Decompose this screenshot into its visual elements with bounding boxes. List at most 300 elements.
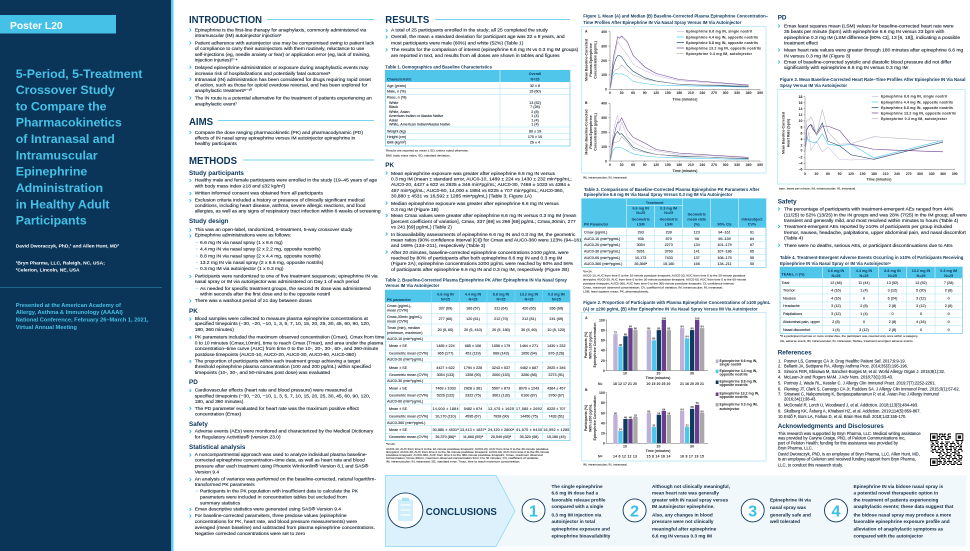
table 2 pk parameters: concentration; Cmax,30min, maximum observed concentration from 0 to 30 minutes; CV, coefficient of variation; bbox=[386, 456, 539, 460]
legend figure 2: Epinephrine 8.8 mg IN, bbox=[720, 380, 757, 384]
chart 2A: 0 bbox=[603, 369, 605, 373]
results bullets: The results for the comparison of interest (epinephrine 6.6 mg IN vs 0.3 mg IM groups) bbox=[391, 47, 579, 53]
table 2 pk parameters: 1358 (90) bbox=[465, 373, 481, 377]
table 2 pk parameters: Cmax,30min (pg/mL), bbox=[387, 315, 422, 319]
heading: introduction: INTRODUCTION bbox=[189, 15, 262, 26]
table 2 pk parameters: Mean ± SE bbox=[389, 366, 408, 370]
acknowledgments and disclosures: LLC, to conduct this research study. bbox=[778, 462, 843, 467]
references: Bellanti JA, Settipane RA. Allergy Asthma Proc. 2014;35(3):195-196. bbox=[784, 364, 908, 369]
chart 2B: N= bbox=[598, 454, 603, 458]
chart 2A: 20 bbox=[601, 359, 605, 363]
table 1 demographics: Asian bbox=[389, 118, 398, 122]
table 2 pk parameters: mean (CV%) bbox=[387, 308, 408, 312]
results pk bullets: vs 241 [69] pg/mL) (Table 2) bbox=[391, 224, 452, 230]
table 2 pk parameters: Geometric mean (CV%) bbox=[389, 394, 428, 398]
table 2 pk parameters: N=25 bbox=[525, 298, 533, 302]
table 2 pk parameters: 120 (61) bbox=[466, 317, 480, 321]
methods pk: Blood samples were collected to measure plasma epinephrine concentrations at bbox=[195, 316, 369, 322]
legend figure 3 bbox=[872, 95, 956, 121]
table 2 pk parameters: mean (CV%) bbox=[387, 320, 408, 324]
table 2 pk parameters: Mean ± SE bbox=[389, 428, 408, 432]
acknowledgments and disclosures: Acknowledgments and Disclosures bbox=[778, 423, 884, 430]
table 2 pk parameters: Table 2. Baseline-Corrected Plasma Epinephrine PK After Epinephrine IN Via Nasal Spray bbox=[385, 278, 568, 282]
table 2 pk parameters: 0.3 mg IM bbox=[548, 292, 565, 296]
table 3 pk comparison: 55 bbox=[750, 256, 754, 260]
chart 2B: 56 bbox=[657, 411, 661, 415]
figure 3 heart rate chart: 210 bbox=[883, 172, 889, 176]
statistical analysis: Emax descriptive statistics were generated using SAS® Version 9.4 bbox=[195, 506, 341, 512]
legend figure 1 bbox=[677, 30, 761, 56]
chart 1B: 180 bbox=[676, 163, 682, 167]
references: 6. bbox=[778, 387, 781, 392]
methods pk: postdose timepoints (AUC0-10, AUC0-20, AUC0-30, AUC0-60, AUC0-360) bbox=[195, 352, 356, 358]
methods pd: 180, and 360 minutes) bbox=[195, 399, 244, 405]
conclusion 1: 0.3 mg IM injection via bbox=[552, 513, 602, 518]
table 4 adverse events: 0 bbox=[948, 320, 950, 324]
introduction bullets: Epinephrine is the first-line therapy for anaphylaxis, commonly administered via bbox=[195, 28, 367, 34]
table 3 pk comparison: 3054 bbox=[637, 243, 645, 247]
table 4 adverse events: 2 (8) bbox=[945, 304, 952, 308]
poster title: Administration bbox=[16, 181, 103, 195]
conclusion 2: mean heart rate was generally bbox=[652, 490, 719, 495]
conclusion 4: compared with the autoinjector bbox=[854, 534, 923, 538]
chart 1B: 30 bbox=[620, 163, 624, 167]
chart 1B: Time (minutes) bbox=[673, 169, 697, 173]
chart 1A: 120 bbox=[653, 91, 659, 95]
table 3 pk comparison: 0.3 mg IM bbox=[660, 206, 677, 210]
aims text bbox=[190, 130, 363, 147]
references: Fleming JT, Clark S, Camargo CA Jr, Rudders SA. J Allergy Clin Immunol Pract. 2015;3(1):57-62. bbox=[784, 387, 960, 392]
methods pk bbox=[189, 308, 385, 376]
authors and affiliations: David Dworaczyk, PhD,¹ and Allen Hunt, MD² bbox=[16, 244, 119, 250]
table 2 pk parameters: Mean ± SE bbox=[389, 344, 408, 348]
table 3 pk comparison: 94–161 bbox=[718, 230, 731, 234]
table 4 adverse events: 2 (8) bbox=[889, 328, 896, 332]
results pd bullets: Emax least squares mean (LSM) values for baseline-corrected heart rate were bbox=[784, 24, 954, 30]
legend figure 1: Epinephrine 8.8 mg IN, opposite nostrils bbox=[686, 41, 758, 45]
conclusion 1: epinephrine exposure and bbox=[552, 526, 610, 532]
table 4 adverse events bbox=[780, 255, 964, 343]
figure 3 heart rate chart: 30 bbox=[815, 172, 818, 176]
references: Skulberg KK, Åsberg A, Khiabani HZ, et al. Addiction. 2019;114(5):859-867. bbox=[784, 408, 921, 413]
references: 2016;34(1):38-43. bbox=[784, 397, 817, 402]
table 4 adverse events: 3 (12) bbox=[831, 304, 841, 308]
chart 2A: 40 bbox=[601, 349, 605, 353]
conclusion 2 bbox=[623, 484, 730, 538]
results pk bullets: [percent coefficient of variation], Cmax, 337 [69] vs 266 [69] pg/mL; Cmax,30min, 277 bbox=[391, 219, 576, 225]
conclusion 4: alleviation of anaphylactic symptoms as bbox=[854, 526, 944, 532]
chart 1B: 390 bbox=[757, 163, 763, 167]
chart 1A: 210 bbox=[688, 91, 694, 95]
chart 2B: 76 bbox=[696, 401, 699, 405]
results pd bullets: Emax of baseline-corrected systolic and diastolic blood pressure did not differ bbox=[784, 60, 952, 66]
figure 1 epinephrine concentration profiles: Figure 1. Mean (A) and Median (B) Baseline-Corrected Plasma Epinephrine Concentration– bbox=[583, 14, 769, 18]
acknowledgments and disclosures bbox=[778, 423, 921, 467]
table 1 demographics: White bbox=[389, 101, 398, 105]
table 2 pk parameters bbox=[385, 278, 570, 464]
results safety bullets: The percentage of participants with treatment-emergent AEs ranged from 44% bbox=[784, 206, 954, 212]
conclusion 2: 6.6 mg IN versus 0.3 mg IM bbox=[652, 534, 712, 538]
table 4 adverse events: 4 (16) bbox=[831, 296, 841, 300]
poster title: Intramuscular bbox=[16, 148, 98, 162]
chart 2A: 80 bbox=[691, 326, 694, 330]
table 4 adverse events: ᵃIf a participant had two or more similar AEs, the participant was counted only once within a category. bbox=[780, 334, 918, 338]
table 1 demographics: 1 (4) bbox=[531, 118, 539, 122]
table 1 demographics: Male, n (%) bbox=[387, 90, 406, 94]
chart 1A: 0 bbox=[609, 91, 611, 95]
figure 3 heart rate chart: Spray Versus IM Via Autoinjector bbox=[780, 83, 847, 88]
introduction bullets bbox=[190, 28, 375, 108]
table 3 pk comparison: 61 bbox=[750, 230, 754, 234]
methods pd: PD bbox=[189, 379, 198, 386]
table 4 adverse events: Table 4. Treatment-Emergent Adverse Events Occurring in ≥10% of Participants Receiving bbox=[780, 255, 964, 260]
chart 2A: 72 bbox=[614, 331, 617, 335]
table 3 pk comparison: Geometric bbox=[660, 218, 678, 222]
table 1 demographics: Overall bbox=[529, 72, 541, 76]
table 2 pk parameters: 5226 (122) bbox=[437, 394, 454, 398]
table 4 adverse events: 4 (16) bbox=[831, 288, 841, 292]
table 3 pk comparison: AUC0-20 (min*pg/mL) bbox=[584, 243, 620, 247]
conclusion 2: IM autoinjector epinephrine. bbox=[652, 504, 715, 509]
table 3 pk comparison bbox=[582, 187, 766, 293]
figure 3 heart rate chart: 2 bbox=[801, 143, 803, 147]
introduction bullets: of compliance to carry their autoinjectors with them routinely, reluctance to use bbox=[195, 46, 365, 52]
study participants bbox=[189, 170, 381, 214]
table 3 pk comparison: 137 bbox=[694, 256, 700, 260]
table 3 pk comparison: PK Parameter bbox=[584, 223, 609, 227]
table 1 demographics: White, Asian bbox=[389, 110, 410, 114]
chart 2A: 18 12 17 21 20 bbox=[613, 382, 637, 386]
table 2 pk parameters: 212 (81) bbox=[522, 317, 536, 321]
conclusion 2: Also, any changes in blood bbox=[652, 513, 713, 518]
table 3 pk comparison: 141 bbox=[694, 250, 700, 254]
methods pd bbox=[189, 379, 370, 418]
introduction bullets: anaphylactic event⁷ bbox=[195, 102, 237, 108]
figure 3 heart rate chart bbox=[778, 77, 965, 190]
chart 2B: 24 bbox=[619, 428, 622, 432]
table 3 pk comparison: 69–139 bbox=[718, 237, 731, 241]
table 3 pk comparison: 134 bbox=[694, 243, 700, 247]
statistical analysis: Negative corrected concentrations were set to zero bbox=[195, 531, 305, 537]
table 4 adverse events: Nasal discomfort bbox=[783, 328, 810, 332]
table 4 adverse events: 0 bbox=[920, 328, 922, 332]
statistical analysis: corrected epinephrine concentration–time data, as well as heart rate and blood bbox=[195, 458, 365, 464]
table 2 pk parameters: Geometric mean (CV%) bbox=[389, 414, 428, 418]
table 3 pk comparison: Epinephrine 6.6 mg IN Via Nasal Spray Versus 0.3 mg IM Via Autoinjector bbox=[584, 192, 733, 197]
chart 2B: B bbox=[585, 388, 588, 392]
chart 2A: 80 bbox=[601, 328, 605, 332]
figure 2 proportion of participants: IM, intramuscular; IN, intranasal. bbox=[583, 462, 628, 466]
references: 8. bbox=[778, 402, 781, 407]
table 3 pk comparison: 134–211 bbox=[717, 262, 732, 266]
chart 2B: Time (minutes) bbox=[646, 449, 670, 453]
table 2 pk parameters: 1464 ± 271 bbox=[520, 344, 538, 348]
table 2 pk parameters: 17,585 ± 2692 bbox=[516, 407, 542, 411]
table 2 pk parameters: 5482 ± 674 bbox=[464, 407, 482, 411]
study design: within seconds after the first dose and to the opposite nostril bbox=[200, 292, 330, 298]
chart 2A: Participants (%) bbox=[584, 332, 588, 358]
table 4 adverse events: 0 bbox=[948, 312, 950, 316]
table 4 adverse events: N=25 bbox=[944, 274, 953, 278]
chart 1A: 180 bbox=[676, 91, 682, 95]
study design: nasal spray or IM via autoinjector was administered on Day 1 of each period bbox=[195, 279, 359, 285]
results safety bullets bbox=[778, 198, 967, 249]
aims text: healthy participants bbox=[195, 141, 237, 147]
table 2 pk parameters: 241 (69) bbox=[549, 317, 563, 321]
table 1 demographics: Weight (kg) bbox=[387, 129, 406, 133]
table 2 pk parameters: AUC0-30 (min*pg/mL) bbox=[387, 379, 423, 383]
table 2 pk parameters: 13,413 ± 1837ᵃ bbox=[460, 428, 487, 432]
table 3 pk comparison: 2273 bbox=[665, 243, 673, 247]
statistical analysis: Participants in the PK population with insufficient data to calculate the PK bbox=[200, 488, 359, 494]
chart 2A: 100 bbox=[661, 316, 667, 320]
table 3 pk comparison: Treatment bbox=[646, 201, 664, 205]
table 2 pk parameters: 8225 ± 707 bbox=[547, 407, 566, 411]
table 4 adverse events: 6.6 mg IN bbox=[828, 269, 845, 273]
figure 3 heart rate chart: 180 bbox=[871, 172, 877, 176]
methods pk: 0 to 10 minutes (Cmax,10min), time to reach Cmax (Tmax), and area under the plasma bbox=[195, 340, 384, 346]
figure 3 heart rate chart: 18 bbox=[799, 95, 803, 99]
references: McLean-Jr and Rogers MAM. J Adv Nurs. 2018;73(1):33-43. bbox=[784, 375, 893, 380]
table 1 demographics: 2 (8) bbox=[531, 110, 539, 114]
table 2 pk parameters: 451 (119) bbox=[465, 352, 481, 356]
table 2 pk parameters: 24,120 ± 2800ᵃ bbox=[488, 428, 515, 432]
figure 3 heart rate chart: 240 bbox=[894, 172, 900, 176]
chart 2A: 84 bbox=[629, 324, 632, 328]
table 2 pk parameters: 4.4 mg IN bbox=[465, 292, 482, 296]
references: McDonald R, Lorch U, Woodward J, et al. Addiction. 2018;113(3):484-493. bbox=[784, 402, 918, 407]
results pk bullets: Median epinephrine exposure was greater after epinephrine 6.6 mg IN versus bbox=[391, 201, 559, 207]
conclusion 2: Although not clinically meaningful, bbox=[652, 484, 730, 489]
table 1 demographics: Black bbox=[389, 105, 398, 109]
study participants: allergies, as well as any signs of respiratory tract infection within 6 weeks of screening bbox=[195, 208, 381, 214]
aims text: effects of IN nasal spray epinephrine versus IM autoinjector epinephrine in bbox=[195, 136, 356, 142]
results pd bullets: IN versus 0.3 mg IM (Figure 3) bbox=[784, 54, 851, 60]
qr code bbox=[930, 433, 963, 466]
table 2 pk parameters: 311 (64) bbox=[494, 306, 508, 310]
methods pd: specified timepoints (−30, −20, −10, 1, 3, 5, 7, 10, 15, 20, 25, 30, 45, 60, 90, 120, bbox=[195, 394, 370, 400]
table 1 demographics: 1 (4) bbox=[531, 123, 539, 127]
conclusion 4 bbox=[824, 484, 954, 538]
table 4 adverse events: 13.2 mg IN bbox=[912, 269, 931, 273]
heading: results: RESULTS bbox=[385, 15, 429, 26]
chart 2A: 100 bbox=[599, 318, 605, 322]
chart 2B: 48 bbox=[629, 415, 632, 419]
statistical analysis: pressure after each treatment using Phoenix WinNonlin® Version 8.1 and SAS® bbox=[195, 462, 369, 470]
table 2 pk parameters: 30 (5, 60) bbox=[521, 328, 537, 332]
methods pk: threshold epinephrine plasma concentration (100 and 200 pg/mL) within specified bbox=[195, 364, 371, 370]
poster title: Epinephrine bbox=[16, 164, 87, 178]
figure 3 heart rate chart: 270 bbox=[906, 172, 912, 176]
table 2 pk parameters: AUC0-10, AUC from time 0 to the 10-minute postdose timepoint; AUC0-20, AUC from time 0 to the 20-minute postdose bbox=[386, 447, 549, 451]
chart 1B: 150 bbox=[665, 163, 671, 167]
table 2 pk parameters: N=25 bbox=[441, 298, 450, 302]
results safety bullets: (Table 4) bbox=[784, 236, 803, 242]
chart 2A: 48 bbox=[619, 343, 622, 347]
legend figure 1: Epinephrine 4.4 mg IN, opposite nostrils bbox=[686, 35, 758, 39]
acknowledgments and disclosures: is an employee of Celerion and received funding support from Bryn Pharma, bbox=[778, 457, 916, 462]
table 2 pk parameters: N=25 bbox=[552, 298, 561, 302]
panel: conclusions band bbox=[385, 475, 966, 546]
table 2 pk parameters: AUC0-20 (min*pg/mL) bbox=[387, 358, 423, 362]
results bullets: A total of 25 participants enrolled in the study; all 25 completed the study bbox=[391, 28, 548, 34]
table 4 adverse events: 0 bbox=[891, 312, 894, 316]
panel: column 3 figures and table 3 bbox=[582, 14, 771, 466]
chart 1A: 270 bbox=[711, 91, 717, 95]
table 2 pk parameters: (minimum, maximum) bbox=[387, 331, 422, 335]
table 1 demographics: Height (cm) bbox=[387, 135, 406, 139]
conclusion 3: 3 bbox=[748, 503, 757, 520]
results pk bullets: 30,880 ± 4531 vs 16,592 ± 1285 min*pg/mL) (Table 3; Figure 1A) bbox=[391, 194, 532, 200]
study participants: Written informed consent was obtained from all participants bbox=[195, 190, 323, 196]
table 4 adverse events: 13 (52) bbox=[915, 281, 927, 285]
presentation note: Virtual Annual Meeting bbox=[16, 325, 78, 331]
table 3 pk comparison: AUC0-60 (min*pg/mL) bbox=[584, 256, 620, 260]
heading: methods: METHODS bbox=[189, 156, 237, 167]
table 1 demographics: White, American Indian/Alaska Native bbox=[389, 123, 450, 127]
table 2 pk parameters: IM, intramuscular; IN, intranasal; SE, standard error; Tmax, time to reach maximum concentration. bbox=[386, 460, 520, 464]
results pd bullets: 35 beats per minute (bpm) with epinephrine 6.6 mg IN versus 23 bpm with bbox=[784, 29, 945, 35]
table 2 pk parameters: 10,170 (110) bbox=[435, 414, 456, 418]
table 3 pk comparison: 10,173 bbox=[635, 256, 646, 260]
conclusion 2: pressure were not clinically bbox=[652, 519, 714, 524]
results pk bullets: After 20 minutes, baseline-corrected epinephrine concentrations ≥100 pg/mL were bbox=[391, 250, 569, 256]
methods safety: for Regulatory Activities® (version 23.0) bbox=[195, 434, 281, 440]
table 1 demographics: Results are reported as mean ± SD, unless noted otherwise. bbox=[386, 148, 469, 152]
table 4 adverse events: Headache bbox=[783, 304, 800, 308]
chart 2A bbox=[584, 316, 708, 386]
references: References bbox=[778, 350, 812, 357]
table 2 pk parameters: Tmax (min), median bbox=[387, 326, 420, 330]
chart 2B: 30 bbox=[690, 444, 694, 448]
chart 2A: 84 bbox=[681, 324, 684, 328]
legend figure 2: Epinephrine 4.4 mg IN, bbox=[720, 369, 757, 373]
introduction bullets: intramuscular (IM) autoinjector injection¹ bbox=[195, 33, 282, 39]
table 3 pk comparison: ᵃN=24. bbox=[583, 270, 593, 274]
chart 1B: 210 bbox=[688, 163, 694, 167]
table 3 pk comparison: (%) bbox=[694, 223, 700, 227]
chart 1B: 330 bbox=[734, 163, 740, 167]
figure 3 heart rate chart: 300 bbox=[917, 172, 923, 176]
table 3 pk comparison: 90% CIs bbox=[717, 223, 732, 227]
study design: 13.2 mg IN via nasal spray (2 x 6.6 mg, opposite nostrils) bbox=[200, 260, 324, 266]
introduction bullets: The IN route is a potential alternative for the treatment of patients experiencing an bbox=[195, 96, 372, 102]
introduction bullets: injection injuries)²⁻⁴ bbox=[195, 58, 237, 64]
table 3 pk comparison: 7433 bbox=[665, 256, 673, 260]
chart 2A: 68 bbox=[624, 333, 627, 337]
results pd bullets: epinephrine 0.3 mg IM (LSM difference [90% CI], 13 [6, 18]), indicating a possible bbox=[784, 35, 960, 41]
legend figure 2: autoinjector bbox=[720, 407, 740, 411]
table 2 pk parameters: 6.6 mg IN bbox=[437, 292, 454, 296]
conclusions arrow banner: CONCLUSIONS bbox=[426, 507, 497, 518]
figure 2 proportion of participants: (A) or ≥200 pg/mL (B) After Epinephrine IN Via Nasal Spray Versus IM Via Autoinjector bbox=[583, 306, 758, 312]
results pk bullets: reached by 80% of participants after both epinephrine 6.6 mg IN and 0.3 mg IM bbox=[391, 256, 562, 262]
legend figure 2 bbox=[716, 359, 759, 411]
poster number tag: Poster L20 bbox=[10, 21, 63, 32]
table 3 pk comparison: postdose timepoint; AUC0-360, AUC from time 0 to the 360-minute postdose timepoint; CI, confidence interval; bbox=[583, 281, 734, 285]
results pd bullets: PD bbox=[778, 15, 787, 22]
references: 9. bbox=[778, 408, 781, 413]
chart 2A: 20 bbox=[657, 372, 660, 376]
chart 2B: 16 8 17 19 15 bbox=[680, 454, 704, 458]
results pd bullets: significantly with epinephrine 6.6 mg IN versus 0.3 mg IM bbox=[784, 65, 908, 71]
heading: aims: AIMS bbox=[189, 117, 213, 128]
statistical analysis: A noncompartmental approach was used to analyze individual plasma baseline- bbox=[195, 452, 367, 458]
table 4 adverse events: Tremor bbox=[783, 288, 796, 292]
results safety bullets: (11/25) to 52% (13/25) in the IN groups and was 28% (7/25) in the IM group; all were bbox=[784, 212, 967, 218]
poster title: Participants bbox=[16, 214, 87, 228]
chart 1A: Mean Baseline-Corrected bbox=[585, 39, 589, 81]
chart 1A bbox=[585, 30, 763, 102]
table 2 pk parameters: 11,660 (55)ᵃ bbox=[463, 435, 484, 439]
study design: 4.4 mg IN via nasal spray (2 x 2.2 mg, opposite nostrils) bbox=[200, 246, 321, 252]
conclusion 3 bbox=[741, 498, 811, 524]
table 4 adverse events: 2 (8) bbox=[889, 320, 896, 324]
chart 1B: 240 bbox=[699, 163, 705, 167]
figure 3 heart rate chart: −4 bbox=[798, 162, 803, 166]
table 2 pk parameters: 7469 ± 1033 bbox=[435, 386, 456, 390]
table 2 pk parameters: AUC0-60 (min*pg/mL) bbox=[387, 400, 423, 404]
results safety bullets: transient and generally mild, and most resolved within minutes to hours (Table 4) bbox=[784, 218, 959, 224]
chart 2B: 100 bbox=[599, 391, 605, 395]
table 2 pk parameters: 15,180 (45) bbox=[547, 435, 566, 439]
figure 3 heart rate chart: 390 bbox=[952, 172, 958, 176]
chart 2A: 80 bbox=[647, 326, 651, 330]
results pk bullets: Mean Cmax values were greater after epinephrine 6.6 mg IN versus 0.3 mg IM (mean bbox=[391, 213, 577, 219]
chart 2B: 20 bbox=[657, 444, 660, 448]
chart 2A: 84 bbox=[701, 324, 704, 328]
conclusion 4: a potential novel therapeutic option in bbox=[854, 490, 938, 495]
table 1 demographics: 7 (28) bbox=[530, 105, 540, 109]
chart 2A: 80 bbox=[657, 326, 661, 330]
legend figure 2: single nostril bbox=[720, 362, 741, 366]
table 2 pk parameters: 2273 (91) bbox=[548, 373, 564, 377]
results pk bullets: AUC0-20, 4427 ± 622 vs 2925 ± 346 min*pg/mL; AUC0-30, 7469 ± 1033 vs 4384 ± bbox=[391, 182, 570, 188]
table 3 pk comparison: 64 bbox=[750, 237, 754, 241]
chart 2B: 60 bbox=[601, 411, 605, 415]
poster title: Pharmacokinetics bbox=[16, 116, 122, 130]
chart 2B: 48 bbox=[624, 415, 627, 419]
conclusion 4: the treatment of patients experiencing bbox=[854, 497, 939, 502]
table 2 pk parameters: 876 (126) bbox=[548, 352, 564, 356]
chart 2A: N= bbox=[598, 382, 603, 386]
table 2 pk parameters: 337 (69) bbox=[439, 306, 452, 310]
legend figure 3: Epinephrine 0.3 mg IM, autoinjector bbox=[881, 117, 948, 121]
panel: column 2 results bbox=[385, 15, 584, 464]
chart 2B bbox=[584, 388, 708, 458]
table 2 pk parameters: 4427 ± 622 bbox=[436, 366, 455, 370]
chart 1B: 300 bbox=[723, 163, 728, 167]
legend figure 2: opposite nostrils bbox=[720, 395, 748, 399]
table 1 demographics: 80 ± 19 bbox=[529, 129, 541, 133]
chart 1B: 270 bbox=[711, 163, 717, 167]
chart 1A: 0 bbox=[605, 88, 607, 92]
table 3 pk comparison: mean ratio bbox=[687, 218, 707, 222]
chart 2B: 14 6 12 12 13 bbox=[613, 454, 637, 458]
table 4 adverse events: 0 bbox=[920, 312, 922, 316]
chart 1A: 240 bbox=[699, 91, 705, 95]
introduction bullets: of action, such as those for opioid overdose reversal, and has been explored for bbox=[195, 82, 368, 88]
poster title: of Intranasal and bbox=[16, 132, 115, 146]
table 3 pk comparison: LSM, least squares mean; PK, pharmacokinetic. bbox=[583, 289, 649, 293]
table 3 pk comparison: Table 3. Comparisons of Baseline-Corrected Plasma Epinephrine PK Parameters After bbox=[584, 187, 760, 192]
chart 2B: 60 bbox=[647, 409, 651, 413]
figure 3 heart rate chart: 14 bbox=[799, 107, 803, 111]
table 4 adverse events: 1 (4) bbox=[860, 288, 868, 292]
table 2 pk parameters: 41,675 ± 6430 bbox=[516, 428, 542, 432]
chart 2B: With ≥200 pg/mL bbox=[588, 403, 592, 432]
table 4 adverse events: 2 (8) bbox=[889, 304, 896, 308]
